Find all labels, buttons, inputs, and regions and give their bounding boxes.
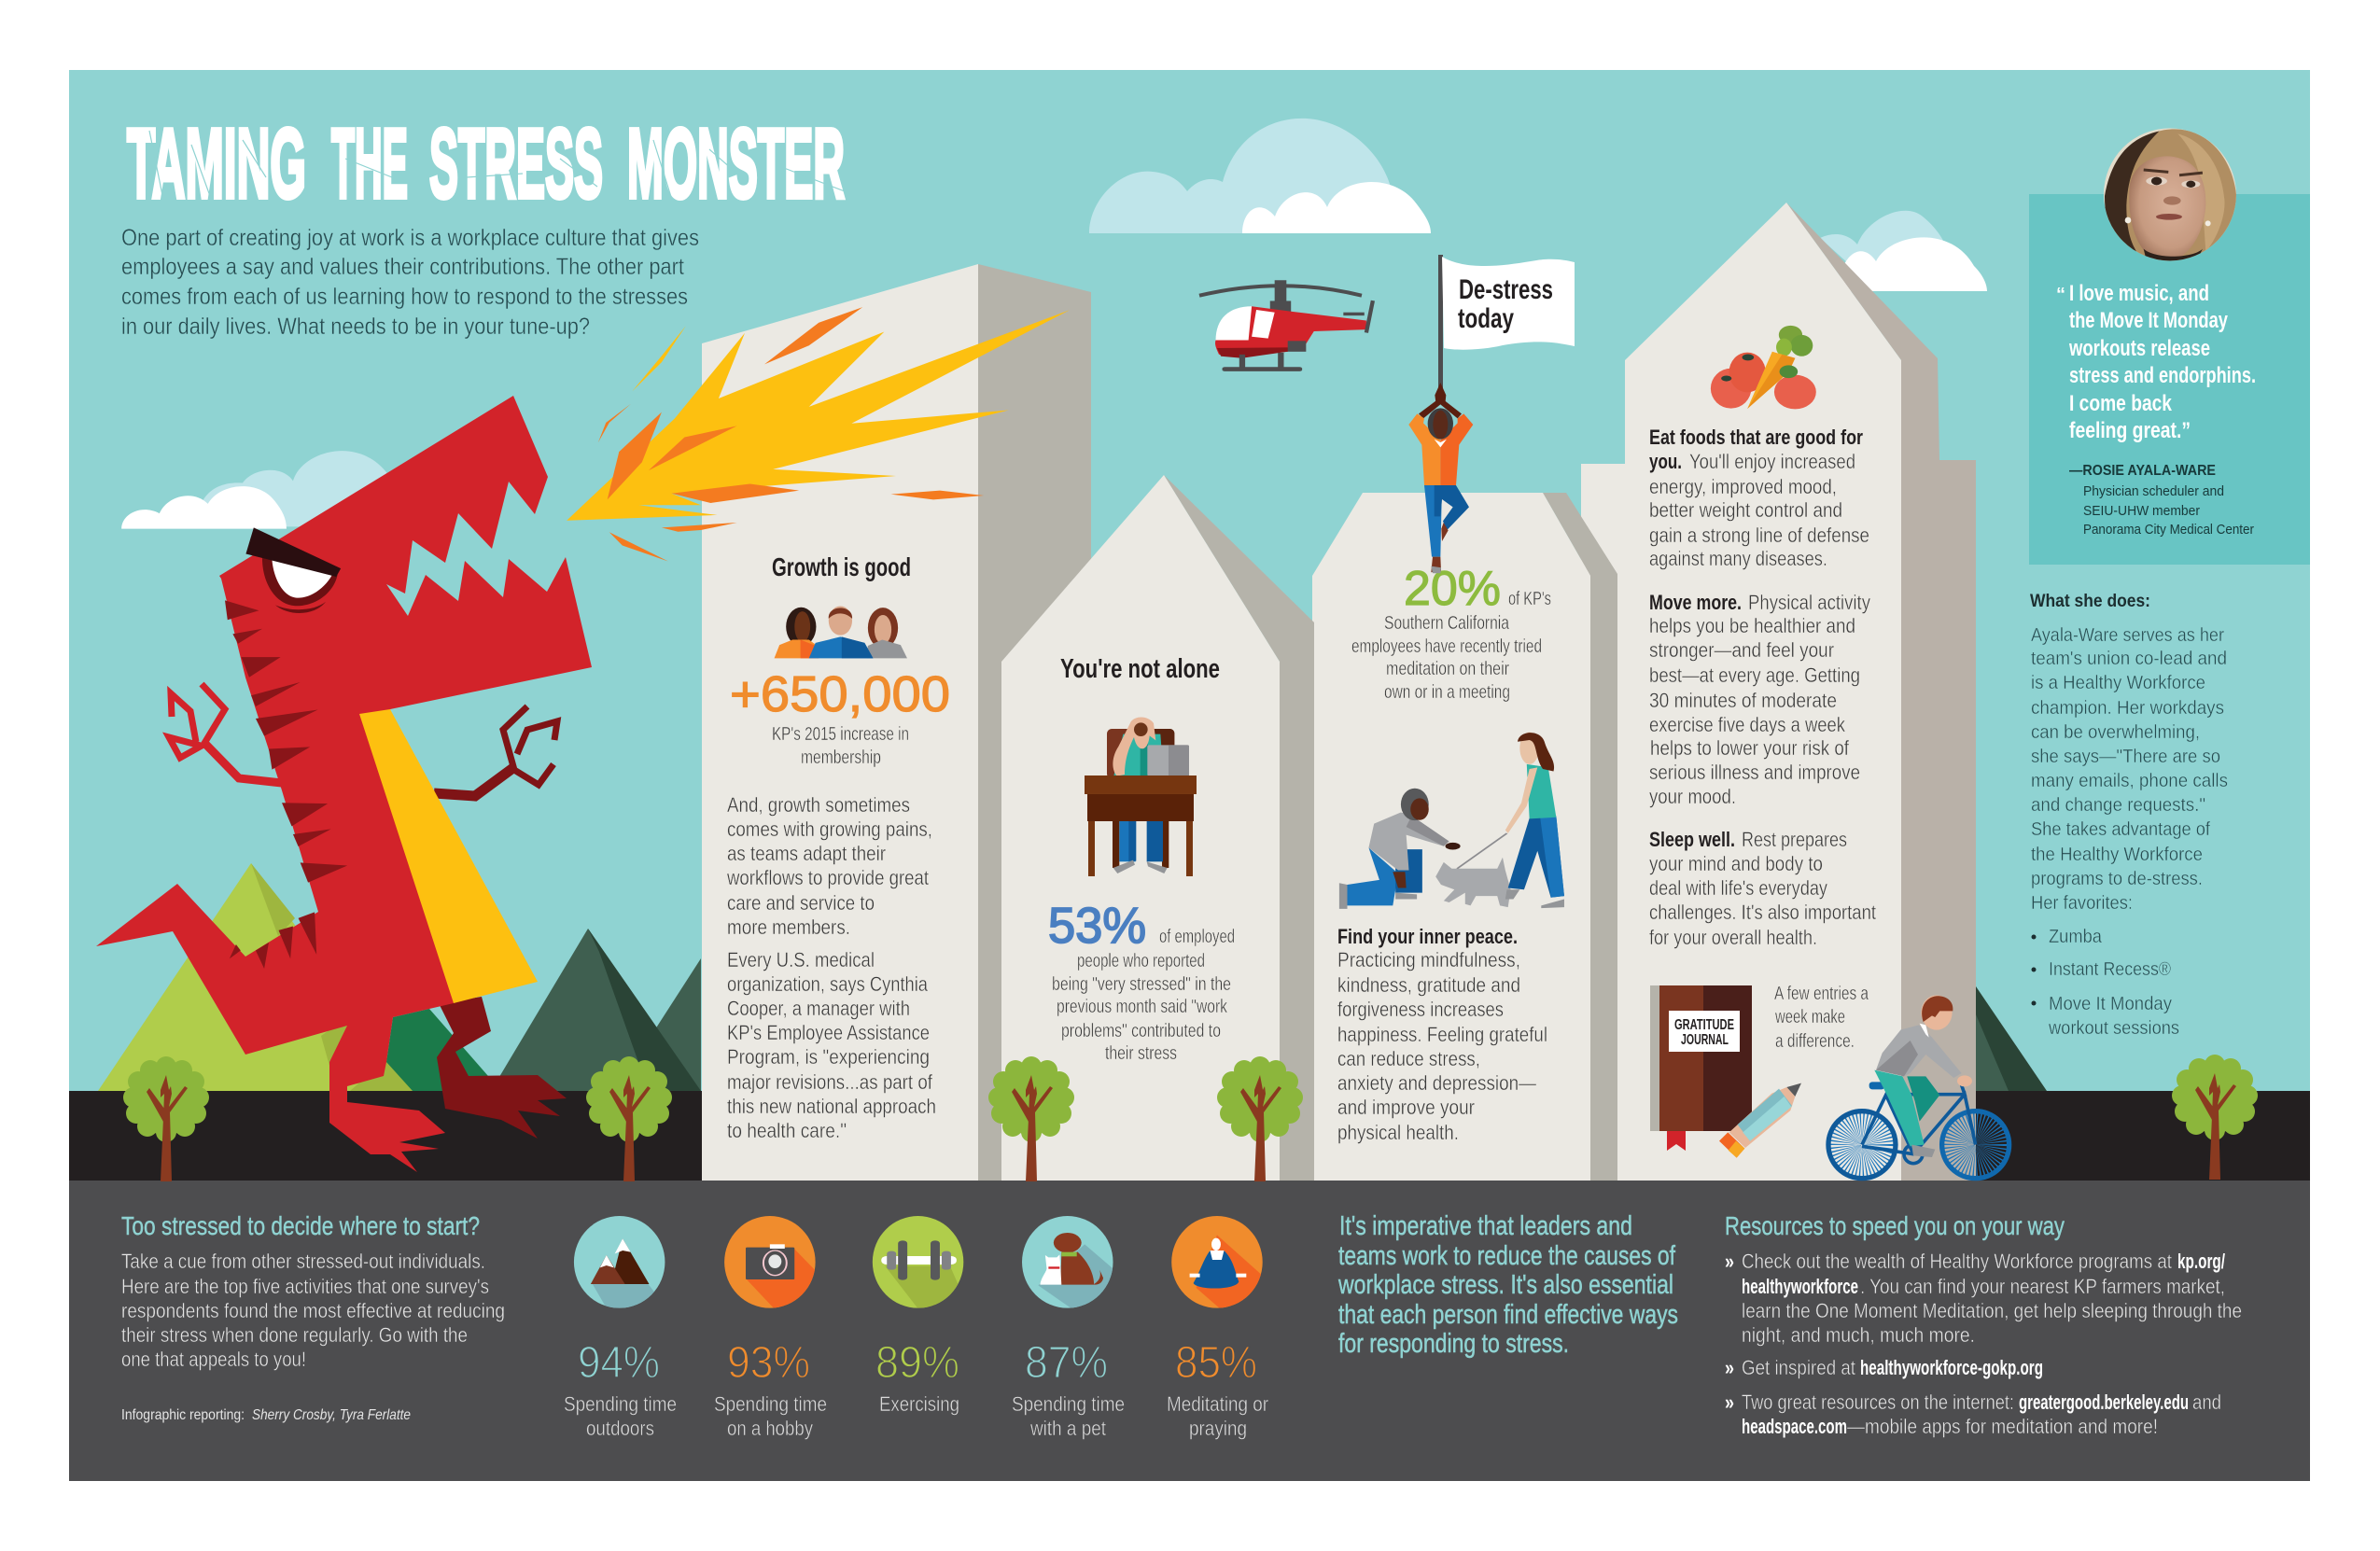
body text: growth: organization, says Cynthia [727,972,929,996]
background panel: sky [69,70,2310,1181]
text: move more: helps to lower your risk of [1650,736,1850,760]
icon: dumbbell [873,1216,969,1308]
panel: you're not alone [1001,475,1314,1181]
text: move more: 30 minutes of moderate [1649,689,1837,712]
resources list: » [1725,1356,1734,1379]
monster spikes [225,600,347,969]
text: move more: exercise five days a week [1649,713,1846,736]
text: find your inner peace: can reduce stress, [1337,1047,1480,1070]
quote text: I come back [2069,391,2173,416]
activity labels: Meditating or [1167,1392,1268,1416]
text: find your inner peace: and improve your [1337,1096,1475,1119]
stat caption [1351,589,1551,703]
stat caption [772,724,909,768]
stat caption: being "very stressed" in the [1052,974,1231,995]
resources list [1725,1211,2242,1438]
text: move more: Physical activity [1748,591,1870,614]
text: find your inner peace: Find your inner peace. [1337,925,1518,948]
cloud: left [121,451,386,529]
text: sleep well: for your overall health. [1649,926,1817,949]
sidebar: what she does: is a Healthy Workforce [2031,673,2205,693]
sidebar: what she does: Zumba [2049,927,2103,947]
stats: activity percentages: 87% [1025,1338,1108,1388]
flag: de-stress today: De-stress [1459,274,1553,305]
text: MONSTER [627,108,845,218]
intro text: One part of creating joy at work is a workplace culture that gives [121,225,699,251]
activity labels: Exercising [879,1392,959,1416]
sidebar: what she does: She takes advantage of [2031,819,2210,840]
text: eat foods: Eat foods that are good for [1649,426,1863,449]
stat caption: of KP's [1508,589,1551,609]
callout: leaders and teams [1337,1211,1678,1359]
text: eat foods [1649,426,1869,570]
body text: growth: Every U.S. medical [727,948,875,971]
title: STRESS [429,108,603,218]
stat caption: people who reported [1077,951,1205,971]
activity labels [564,1392,1268,1440]
icon: pencil [1719,1083,1801,1158]
text: eat foods: gain a strong line of defense [1649,524,1869,547]
title: THE [331,108,408,218]
ground strip [69,1091,2310,1181]
icon: gratitude journal: JOURNAL [1681,1032,1729,1048]
stat caption: problems" contributed to [1061,1021,1221,1041]
body text: growth: And, growth sometimes [727,793,910,817]
intro text [121,225,699,340]
flag: de-stress today: today [1458,303,1514,334]
text: sleep well [1649,828,1876,949]
resources list: Check out the wealth of Healthy Workforce programs at [1742,1250,2172,1273]
activity labels: outdoors [586,1417,654,1440]
mountains [98,863,2047,1091]
text: eat foods: energy, improved mood, [1649,475,1837,498]
sidebar: what she does: programs to de-stress. [2031,869,2203,889]
resources list: » [1725,1250,1734,1273]
text: sleep well: deal with life's everyday [1649,876,1827,900]
monster right arm [434,706,557,796]
stats: activity percentages: 89% [875,1338,959,1388]
sidebar: what she does: Her favorites: [2031,893,2133,914]
title [127,108,845,218]
icon: fruits and vegetables [1711,326,1816,409]
resources list: night, and much, much more. [1742,1323,1975,1347]
quote text: feeling great.” [2069,418,2191,443]
resources list: Get inspired at [1742,1356,1855,1379]
text: sleep well: challenges. It's also important [1649,901,1876,924]
resources list: —mobile apps for meditation and more! [1847,1415,2158,1438]
sidebar: what she does: team's union co-lead and [2031,649,2227,669]
panel: quote box [2029,128,2310,565]
resources list: headspace.com [1742,1415,1847,1438]
activity labels: on a hobby [727,1417,813,1440]
bottom: too stressed intro: their stress when done regularly. Go with the [121,1323,468,1347]
text: find your inner peace: physical health. [1337,1121,1459,1144]
text: move more: stronger—and feel your [1649,638,1834,662]
sidebar: what she does: Ayala-Ware serves as her [2031,625,2224,646]
monster eye [245,527,341,613]
text: eat foods: You'll enjoy increased [1689,450,1855,473]
activity labels: Spending time [564,1392,677,1416]
text: find your inner peace: kindness, gratitude and [1337,973,1520,997]
quote text: stress and endorphins. [2069,363,2256,388]
text: find your inner peace: anxiety and depression— [1337,1071,1536,1095]
sidebar: what she does: champion. Her workdays [2031,698,2224,719]
quote attribution [2069,463,2254,538]
activity labels: Spending time [1012,1392,1125,1416]
stat caption: their stress [1105,1043,1177,1064]
text: find your inner peace: Practicing mindfulness, [1337,948,1520,971]
sidebar: what she does: can be overwhelming, [2031,722,2200,743]
callout: leaders and teams: It's imperative that leaders and [1339,1211,1632,1241]
quote text: workouts release [2068,336,2210,361]
body text: growth: more members. [727,915,850,939]
stat caption: own or in a meeting [1384,682,1510,703]
activity labels: with a pet [1029,1417,1106,1440]
quote attribution: SEIU-UHW member [2083,503,2200,519]
icons: five activities [574,1216,1266,1308]
credit line: Sherry Crosby, Tyra Ferlatte [252,1407,411,1423]
title: TAMING [127,108,306,218]
resources list: . You can find your nearest KP farmers market, [1860,1275,2225,1298]
resources list: healthyworkforce-gokp.org [1860,1356,2043,1379]
text: journal note: a difference. [1775,1031,1855,1052]
text: move more: your mood. [1649,785,1736,808]
illustration: person in tree pose holding flag [1408,383,1473,573]
callout: leaders and teams: for responding to stress. [1338,1329,1569,1359]
monster fire breath [567,307,1070,561]
trees [123,1055,2258,1181]
stat: 20%: 20% [1404,562,1501,616]
text: sleep well: Sleep well. [1649,828,1735,851]
bottom: too stressed intro: Here are the top five activities that one survey's [121,1275,489,1298]
portrait: Rosie Ayala-Ware [2103,128,2237,261]
text: eat foods: you. [1649,450,1682,473]
sidebar: what she does: What she does: [2030,592,2150,611]
monster left arm [169,684,282,783]
monster body and head [96,396,592,1172]
icon: meditating person [1171,1216,1266,1308]
sidebar: what she does: Move It Monday [2049,994,2172,1014]
text: eat foods: against many diseases. [1649,547,1827,570]
stats: activity percentages: 85% [1175,1338,1257,1388]
sidebar: what she does: Instant Recess® [2049,959,2171,980]
cloud: right [1820,211,1987,291]
resources list: greatergood.berkeley.edu [2019,1390,2189,1414]
body text: growth: major revisions...as part of [727,1070,933,1094]
text: move more: helps you be healthier and [1649,614,1855,637]
stat caption: membership [801,748,881,768]
icon: person walking dog [1339,732,1564,909]
bottom: too stressed intro [121,1211,505,1371]
body text: growth: comes with growing pains, [727,817,932,841]
text: journal note [1774,984,1869,1052]
monster far side: green shade and dark leg [386,997,567,1139]
stats: activity percentages [578,1338,1257,1388]
quote attribution: Panorama City Medical Center [2083,522,2254,538]
icon: dog and cat [1022,1216,1117,1308]
callout: leaders and teams: teams work to reduce the causes of [1338,1241,1676,1271]
resources list: Resources to speed you on your way [1725,1211,2065,1240]
text: journal note: A few entries a [1774,984,1869,1004]
activity labels: Spending time [714,1392,827,1416]
bottom: too stressed intro: Too stressed to decide where to start? [121,1211,480,1240]
text: journal note: week make [1774,1007,1845,1027]
body text: growth [726,793,936,1142]
stat caption: of employed [1159,927,1235,947]
quote text [2056,281,2256,443]
stat caption: employees have recently tried [1351,636,1542,657]
icon: stressed person at desk [1085,718,1197,876]
stat caption [1052,927,1235,1064]
heading: growth is good: Growth is good [772,552,911,581]
icon: camera [724,1216,820,1308]
illustration: stress monster [96,396,592,1172]
body text: growth: Cooper, a manager with [727,997,910,1020]
quote attribution: Physician scheduler and [2083,483,2224,499]
resources list: and [2192,1390,2221,1414]
text: sleep well: Rest prepares [1742,828,1847,851]
stat caption: Southern California [1384,613,1510,634]
sidebar: what she does: the Healthy Workforce [2031,845,2203,865]
icon: gratitude journal: GRATITUDE [1674,1017,1734,1033]
flag: de-stress today [1438,255,1575,391]
resources list: » [1725,1390,1734,1414]
body text: growth: care and service to [727,891,875,915]
bottom: too stressed intro: one that appeals to you! [121,1348,306,1371]
sidebar: what she does: workout sessions [2048,1018,2179,1039]
quote text: I love music, and [2069,281,2209,306]
body text: growth: as teams adapt their [727,842,886,865]
sidebar: what she does: and change requests." [2031,795,2205,816]
activity labels: praying [1189,1417,1247,1440]
resources list: healthyworkforce [1742,1275,1858,1298]
stats: activity percentages: 93% [727,1338,810,1388]
stats: activity percentages: 94% [578,1338,660,1388]
body text: growth: this new national approach [727,1095,936,1118]
quote text: “ [2056,285,2065,305]
text: find your inner peace: happiness. Feeling grateful [1337,1023,1547,1046]
icon: mountains [574,1216,666,1308]
text: move more: Move more. [1649,591,1742,614]
bottom band [69,1181,2310,1481]
text: move more [1649,591,1870,808]
callout: leaders and teams: workplace stress. It's also essential [1337,1270,1673,1300]
panel: de-stress today [1312,493,1617,1181]
quote text: the Move It Monday [2069,308,2228,333]
cloud: middle [1089,119,1431,233]
icon: gratitude journal [1650,985,1752,1151]
quote attribution: —ROSIE AYALA-WARE [2069,463,2216,479]
callout: leaders and teams: that each person find effective ways [1338,1300,1678,1330]
icon: three people [775,606,907,658]
resources list: Two great resources on the internet: [1742,1390,2014,1414]
credit line: Infographic reporting: [121,1407,245,1423]
text: sleep well: your mind and body to [1649,852,1823,875]
text: move more: serious illness and improve [1649,761,1860,784]
resources list: kp.org/ [2177,1250,2225,1273]
text: find your inner peace [1337,925,1547,1144]
intro text: employees a say and values their contributions. The other part [121,254,684,280]
stat caption: meditation on their [1386,659,1509,679]
stat caption: KP's 2015 increase in [772,724,909,745]
body text: growth: to health care." [727,1119,847,1142]
text: eat foods: better weight control and [1649,498,1842,522]
sidebar: what she does: she says—"There are so [2031,747,2220,767]
credit line [121,1407,411,1423]
bottom: too stressed intro: respondents found the most effective at reducing [121,1299,505,1322]
body text: growth: Program, is "experiencing [727,1045,930,1069]
illustration: person riding bicycle [1828,995,2009,1179]
illustration: helicopter [1199,280,1375,371]
sidebar: what she does [2030,592,2228,1039]
text: find your inner peace: forgiveness increases [1337,998,1504,1021]
body text: growth: KP's Employee Assistance [727,1021,930,1044]
panel: growth is good [702,264,1091,1181]
resources list: learn the One Moment Meditation, get help sleeping through the [1742,1299,2242,1322]
body text: growth: workflows to provide great [726,866,929,889]
panel: eat, move, sleep tips [1581,203,1976,1181]
stat caption: previous month said "work [1057,997,1228,1017]
bottom: too stressed intro: Take a cue from other stressed-out individuals. [121,1250,485,1273]
stat: +650,000: +650,000 [730,666,950,722]
sidebar: what she does: many emails, phone calls [2031,771,2228,791]
intro text: in our daily lives. What needs to be in your tune-up? [121,314,590,340]
intro text: comes from each of us learning how to respond to the stresses [121,284,688,310]
text: move more: best—at every age. Getting [1649,664,1860,687]
stat: 53%: 53% [1048,898,1146,954]
monster belly [359,709,538,1003]
heading: you're not alone: You're not alone [1060,654,1220,684]
